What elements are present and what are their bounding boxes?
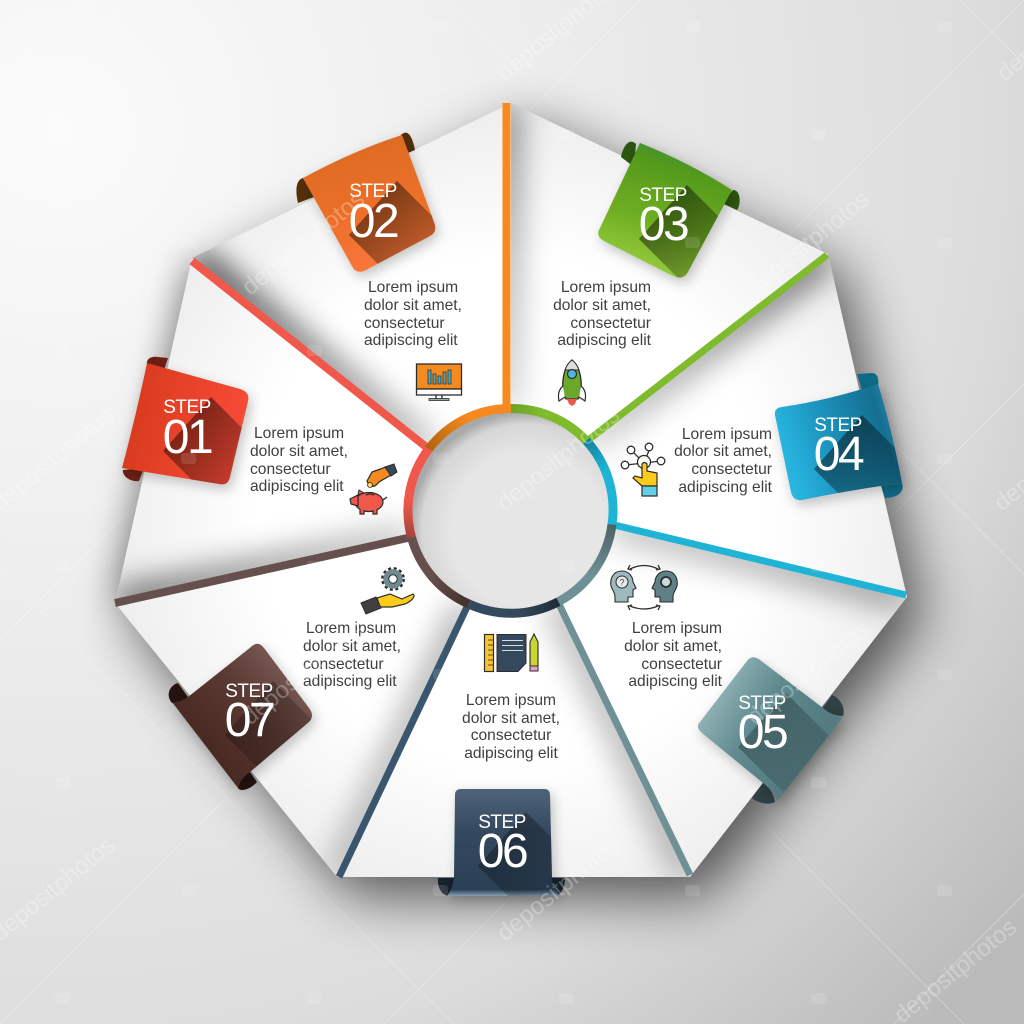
text block: step 06: consectetur	[471, 727, 551, 744]
text block: step 01: consectetur	[250, 461, 331, 478]
text block: step 07: Lorem ipsum	[306, 620, 396, 637]
text block: step 01: Lorem ipsum	[254, 425, 344, 442]
icon: touch network	[621, 443, 665, 496]
text block: step 06: dolor sit amet,	[462, 710, 560, 727]
watermark overlay: depositphotos	[492, 402, 625, 517]
step 04 ribbon: 04	[814, 428, 864, 481]
step 06 ribbon	[438, 787, 565, 905]
watermark overlay: depositphotos	[237, 186, 370, 301]
step 05 ribbon: STEP	[738, 693, 786, 714]
text block: step 05: consectetur	[641, 656, 722, 673]
text block: step 02: dolor sit amet,	[364, 297, 462, 314]
watermark overlay: depositphotos	[742, 616, 875, 731]
watermark overlay: depositphotos	[742, 186, 875, 301]
text block: step 07: dolor sit amet,	[303, 638, 401, 655]
icon: ruler, document, pencil	[484, 634, 538, 672]
icon: hand and piggy bank	[350, 464, 397, 514]
text block: step 03: consectetur	[570, 315, 651, 332]
center circle	[412, 412, 610, 610]
text block: step 04: consectetur	[691, 461, 772, 478]
text block: step 06: Lorem ipsum	[466, 692, 556, 709]
step 05 ribbon	[697, 657, 845, 804]
step 03 ribbon: 03	[639, 198, 688, 251]
text block: step 04: Lorem ipsum	[682, 426, 772, 443]
step 01 ribbon: STEP	[163, 397, 211, 418]
icon: hand holding gear	[361, 568, 414, 614]
text block: step 01: adipiscing elit	[250, 478, 344, 495]
text block: step 01: dolor sit amet,	[250, 443, 348, 460]
step 01 ribbon	[122, 356, 256, 494]
watermark overlay: depositphotos	[492, 832, 625, 947]
icon: monitor	[416, 364, 462, 400]
text block: step 04: dolor sit amet,	[674, 443, 772, 460]
panel shadows	[115, 103, 907, 877]
divider strips	[115, 103, 906, 877]
step 02 ribbon: 02	[349, 195, 398, 248]
text block: step 03: Lorem ipsum	[561, 279, 651, 296]
outer drop shadow	[115, 123, 923, 897]
step 04 ribbon	[773, 373, 908, 510]
text block: step 03: dolor sit amet,	[553, 297, 651, 314]
text block: step 07: adipiscing elit	[303, 673, 397, 690]
step 01 ribbon: 01	[163, 411, 212, 464]
icon: two heads exchanging ideas: ?	[619, 578, 625, 588]
text block: step 07: consectetur	[303, 656, 384, 673]
watermark overlay: depositphotos	[237, 616, 370, 731]
step 07 ribbon: STEP	[225, 681, 273, 702]
step 06 ribbon: STEP	[478, 812, 526, 833]
step 06 ribbon: 06	[478, 825, 527, 878]
step 05 ribbon: 05	[738, 706, 787, 759]
ring segments	[408, 408, 613, 613]
panel: heptagon paper	[115, 103, 907, 877]
text block: step 03: adipiscing elit	[557, 332, 652, 349]
step 02 ribbon: STEP	[349, 181, 397, 202]
step 02 ribbon	[296, 132, 443, 281]
icon: two heads exchanging ideas	[611, 565, 677, 610]
text block: step 02: consectetur	[364, 315, 445, 332]
text block: step 05: Lorem ipsum	[632, 620, 722, 637]
text block: step 04: adipiscing elit	[678, 479, 773, 496]
step 07 ribbon: 07	[225, 694, 274, 747]
step 04 ribbon: STEP	[814, 415, 862, 436]
step 07 ribbon	[168, 644, 320, 792]
icon: rocket	[558, 360, 586, 406]
step 03 ribbon: STEP	[639, 185, 687, 206]
text block: step 05: dolor sit amet,	[624, 638, 722, 655]
text block: step 02: Lorem ipsum	[368, 279, 458, 296]
text block: step 05: adipiscing elit	[628, 673, 723, 690]
step 03 ribbon	[597, 142, 740, 287]
text block: step 02: adipiscing elit	[364, 332, 458, 349]
text block: step 06: adipiscing elit	[464, 745, 558, 762]
